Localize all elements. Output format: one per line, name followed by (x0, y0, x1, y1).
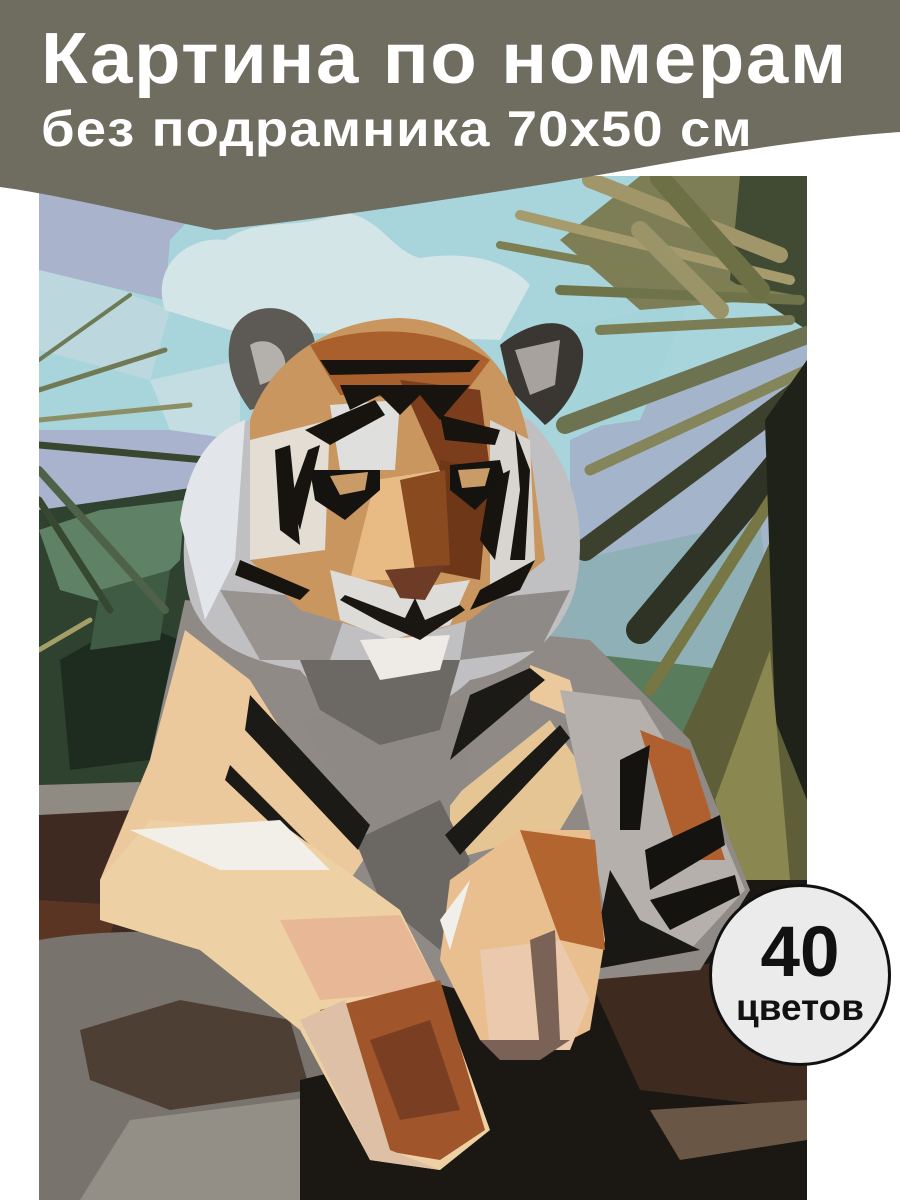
sky and clouds (39, 176, 807, 732)
badge label: цветов (736, 987, 864, 1028)
palm leaves left (39, 295, 205, 650)
palm leaves right (500, 176, 807, 890)
forest background (39, 488, 740, 790)
painting: tiger on a log (39, 176, 807, 1200)
subtitle: без подрамника 70х50 см (41, 101, 753, 157)
header banner (0, 0, 900, 230)
badge: 40 colours (709, 884, 891, 1066)
title: Картина по номерам (41, 19, 848, 99)
log (39, 782, 807, 1200)
tiger front legs (100, 820, 605, 1170)
tiger head and ruff (180, 308, 583, 745)
tiger body (100, 600, 750, 990)
badge number: 40 (760, 913, 839, 992)
